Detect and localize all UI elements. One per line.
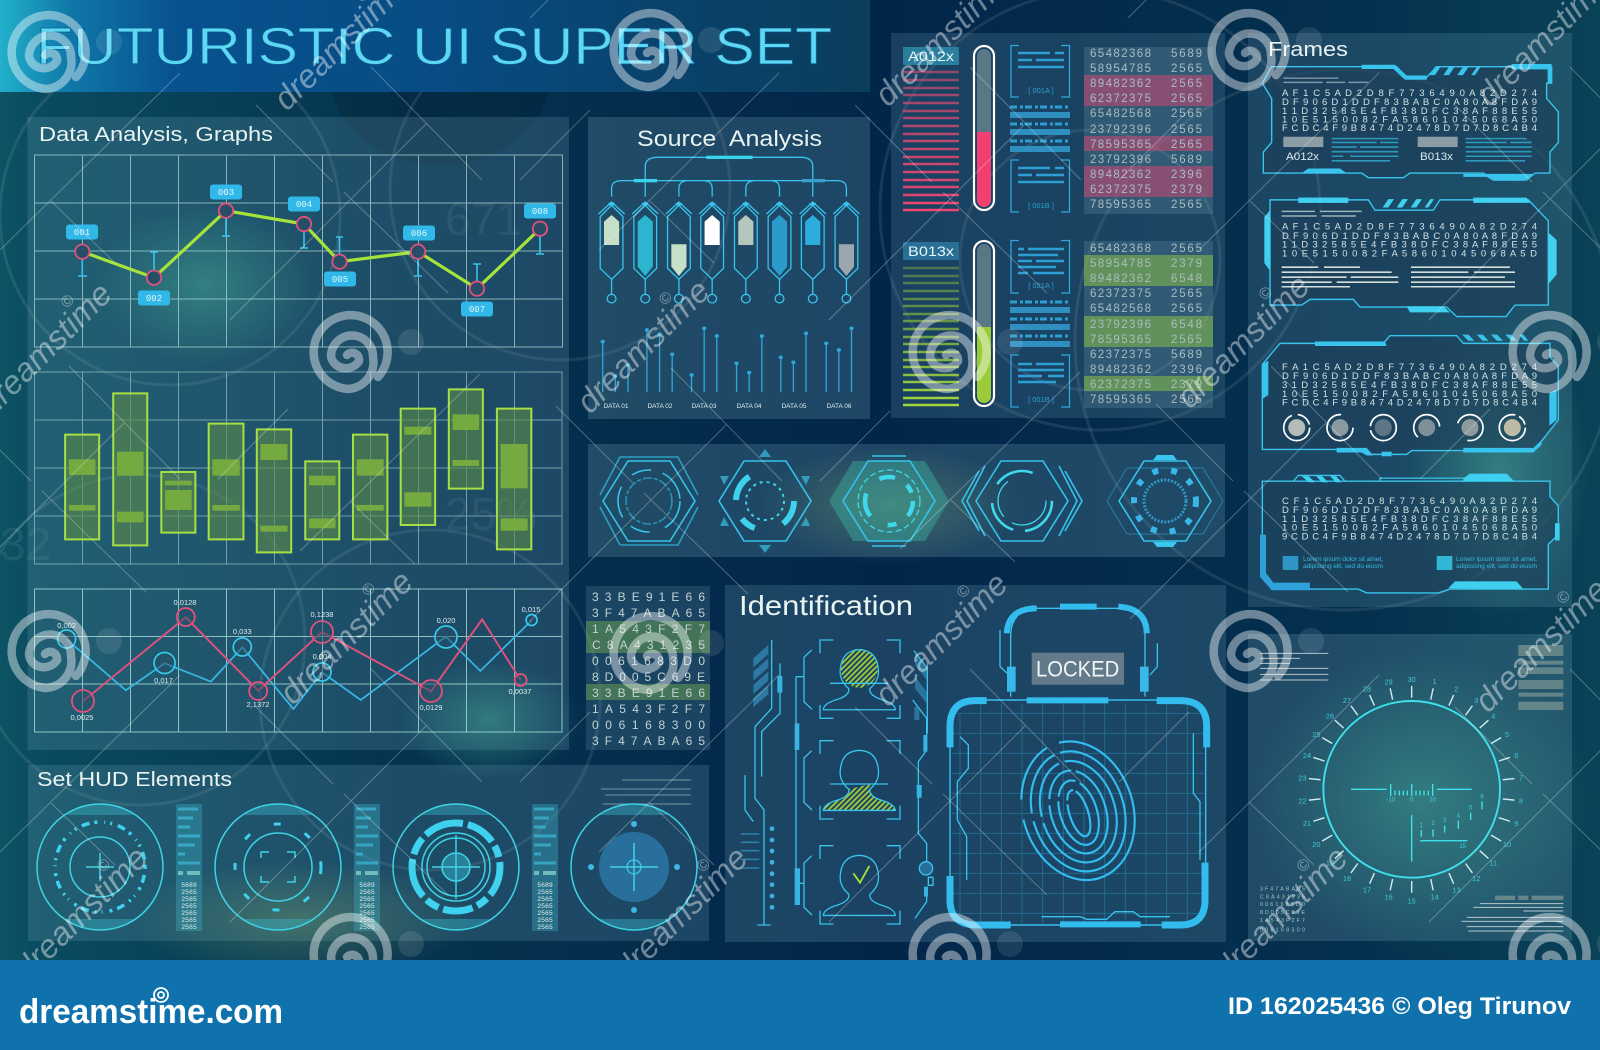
frame 4: adipiscing elit, sed do eiusm <box>1303 563 1383 570</box>
side bars and data lines: 8D005C69E <box>1260 910 1305 916</box>
panel: HUD elements <box>28 765 709 980</box>
table: A012x values: 23792396 <box>1090 154 1151 166</box>
scope numbers: 1 <box>1433 677 1437 686</box>
panel: identification <box>725 585 1226 942</box>
bracket text blocks <box>1010 46 1070 407</box>
table: B013x values: 78595365 <box>1090 334 1151 346</box>
fingerprint <box>1004 727 1152 895</box>
footer logo: dreamstime.com: dreamstime.com <box>19 993 283 1031</box>
lollipop chart: data 01-06: DATA 01 <box>603 403 629 410</box>
padlock with fingerprint <box>950 607 1207 925</box>
scope numbers: 11 <box>1490 859 1497 868</box>
table: A012x values: 62372375 <box>1090 184 1151 196</box>
side bars and data lines: 1A543F2F7 <box>1260 918 1305 924</box>
frame 3: F A 1 C 5 A D 2 D 8 F 7 7 3 6 4 9 0 A 8 2 D 2 7 4 <box>1282 362 1537 373</box>
frame 1: 1 1 D 3 2 5 8 5 E 4 F B 3 8 D F C 3 8 A F 8 8 E 5 5 <box>1282 106 1537 117</box>
scope numbers: 4 <box>1491 711 1495 720</box>
channel B013x: B013x <box>908 243 954 259</box>
table: B013x values: 2565 <box>1171 394 1202 406</box>
scope numbers: 20 <box>1312 840 1320 849</box>
panel: hex code list: 3F47ABA65 <box>592 606 705 620</box>
panel: hexagon indicators <box>588 444 1225 565</box>
table: A012x values: 89482362 <box>1090 169 1151 181</box>
channel A012x <box>903 46 994 210</box>
title: FUTURISTIC UI SUPER SET <box>36 18 832 76</box>
table: B013x values: 6548 <box>1171 319 1202 331</box>
table: A012x values: 78595365 <box>1090 139 1151 151</box>
line chart: cyan and pink series: 0,0025 <box>71 713 93 722</box>
line chart: cyan and pink series: 0,0129 <box>420 703 442 712</box>
line chart: cyan and pink series <box>34 589 562 732</box>
line chart: data points 001-008: 002 <box>146 294 162 304</box>
bracket text blocks: [ 001A ] <box>1028 86 1054 95</box>
frame 4: Lorem ipsum dolor sit amet, <box>1456 556 1537 563</box>
scope numbers: 28 <box>1363 684 1371 693</box>
table: A012x values: 2565 <box>1171 124 1202 136</box>
profile 2: shoulder scan <box>804 741 900 819</box>
side bars and data lines <box>1260 645 1563 934</box>
lollipop chart: data 01-06: DATA 02 <box>647 403 673 410</box>
line chart: data points 001-008: 006 <box>411 229 427 239</box>
frame 2: 1 0 E 5 1 5 0 0 8 2 F A 5 8 6 0 1 0 4 5 0 6 8 A 5 D <box>1282 248 1537 260</box>
frame 1: A F 1 C 5 A D 2 D 8 F 7 7 3 6 4 9 0 A 8 2 D 2 7 4 <box>1282 88 1537 99</box>
heading: set HUD elements: Set HUD Elements <box>37 769 232 791</box>
table: A012x values: 2565 <box>1171 93 1202 105</box>
frame 4: adipiscing elit, sed do eiusm <box>1456 563 1537 570</box>
scope circle <box>1323 701 1500 878</box>
panel: hex code list: 33BE91E66 <box>592 686 705 700</box>
scope numbers: 24 <box>1303 751 1311 760</box>
reticle scale: 2 <box>1431 821 1435 827</box>
frame 3: 1 0 E 5 1 5 0 0 8 2 F A 5 8 6 0 1 0 4 5 0 6 8 A 5 0 <box>1282 389 1537 400</box>
table: A012x values: 89482362 <box>1090 78 1151 90</box>
frame 4 <box>1260 474 1560 593</box>
scope numbers: 21 <box>1303 819 1311 828</box>
frame 1: B013x <box>1420 151 1454 163</box>
table: B013x values: 2565 <box>1171 303 1202 315</box>
heading: identification: Identification <box>739 590 913 621</box>
reticle scale: 5 <box>1469 805 1473 811</box>
panel: hex code list: C8A431235 <box>592 638 705 652</box>
table: A012x values: 2396 <box>1171 169 1202 181</box>
hexagon 1 <box>600 457 698 545</box>
panel: frames <box>1248 33 1590 620</box>
panel: radar scope <box>1248 634 1590 950</box>
lollipop chart: data 01-06: DATA 03 <box>691 403 717 410</box>
frame 2 <box>1264 198 1557 317</box>
table: A012x values: 2565 <box>1171 63 1202 75</box>
table: B013x values: 62372375 <box>1090 379 1151 391</box>
line chart: cyan and pink series: 0,1238 <box>311 610 333 619</box>
scope numbers: 14 <box>1431 893 1439 902</box>
scope numbers: 23 <box>1298 773 1306 782</box>
hexagon 5 <box>1107 455 1223 547</box>
table: A012x values: 2565 <box>1171 139 1202 151</box>
frame 1: D F 9 0 6 D 1 D D F 8 3 B A B C 0 A 8 0 A 8 F D A 9 <box>1282 97 1537 108</box>
panel: hex code list: 1A543F2F7 <box>592 702 705 716</box>
panel: hex code list: 33BE91E66 <box>592 590 705 604</box>
panel: hex code list: 3F47ABA65 <box>592 734 705 748</box>
table: B013x values: 62372375 <box>1090 288 1151 300</box>
reticle scale: 4 <box>1457 813 1461 819</box>
line chart: cyan and pink series: 2,1372 <box>247 700 269 709</box>
bracket text blocks: [ 001B ] <box>1028 201 1054 210</box>
table: B013x values: 2379 <box>1171 379 1202 391</box>
table: A012x values: 5689 <box>1171 48 1202 60</box>
table: B013x values: 6548 <box>1171 273 1202 285</box>
line chart: cyan and pink series: 0,020 <box>437 616 455 625</box>
table: B013x values: 65482568 <box>1090 303 1151 315</box>
table: A012x values: 65482568 <box>1090 108 1151 120</box>
table: A012x values: 2565 <box>1171 78 1202 90</box>
heading: frames: Frames <box>1268 39 1348 61</box>
table: A012x values: 2565 <box>1171 108 1202 120</box>
panel: source analysis <box>588 117 870 419</box>
panel: hex code list: 006168300 <box>592 718 705 732</box>
footer image credit: ID 162025436 © Oleg Tirunov <box>1228 993 1572 1020</box>
frame 1: A012x <box>1286 151 1320 163</box>
line chart: data points 001-008: 001 <box>74 228 90 238</box>
table: B013x values <box>1084 241 1213 408</box>
line chart: cyan and pink series: 0,0128 <box>174 598 196 607</box>
hexagon 2 <box>719 449 811 553</box>
scope numbers: 17 <box>1363 886 1371 895</box>
channel A012x: A012x <box>908 48 954 64</box>
frame 2: A F 1 C 5 A D 2 D 8 F 7 7 3 6 4 9 0 A 8 2 D 2 7 4 <box>1282 222 1537 233</box>
scope numbers <box>1298 675 1523 905</box>
LOCKED label: LOCKED <box>1036 657 1119 682</box>
scope numbers: 5 <box>1505 730 1509 739</box>
table: A012x values: 23792396 <box>1090 124 1151 136</box>
scope numbers: 12 <box>1472 874 1480 883</box>
lollipop chart: data 01-06: DATA 05 <box>781 403 807 410</box>
reticle scale: 15 <box>1459 844 1467 850</box>
scope numbers: 19 <box>1326 859 1334 868</box>
lollipop chart: data 01-06: DATA 06 <box>826 403 852 410</box>
scope numbers: 30 <box>1408 675 1416 684</box>
lollipop chart: data 01-06: DATA 04 <box>736 403 762 410</box>
table: A012x values: 2565 <box>1171 199 1202 211</box>
table: A012x values: 65482368 <box>1090 48 1151 60</box>
table: B013x values: 78595365 <box>1090 394 1151 406</box>
frame 4: Lorem ipsum dolor sit amet, <box>1303 556 1383 563</box>
table: A012x values: 5689 <box>1171 154 1202 166</box>
lollipop chart: data 01-06 <box>601 326 854 410</box>
text: 32 <box>0 518 51 570</box>
diagram: connected capsule gauges <box>599 156 859 303</box>
side bars and data lines: 0061683D0 <box>1260 902 1305 908</box>
frame 4: D F 9 0 6 D 1 D D F 8 3 B A B C 0 A 8 0 A 8 F D A 9 <box>1282 505 1537 516</box>
scope numbers: 26 <box>1326 711 1334 720</box>
title banner <box>0 0 870 92</box>
frame 4: 1 0 E 5 1 5 0 0 8 2 F A 5 8 6 0 1 0 4 5 0 6 8 A 5 0 <box>1282 522 1537 534</box>
table: A012x values: 78595365 <box>1090 199 1151 211</box>
frame 3: F C D C 4 F 9 B 8 4 7 4 D 2 4 7 8 D 7 D 7 D 8 C 4 B 4 <box>1282 397 1537 408</box>
data columns <box>176 804 558 931</box>
text: 25% <box>445 488 537 540</box>
table: B013x values: 2565 <box>1171 288 1202 300</box>
reticle scale: 3 <box>1443 818 1447 824</box>
table: B013x values: 65482368 <box>1090 243 1151 255</box>
scope numbers: 29 <box>1385 677 1393 686</box>
left circuit decoration <box>741 640 804 925</box>
reticle scale: -10 <box>1386 797 1396 803</box>
frame 1: F C D C 4 F 9 B 8 4 7 4 D 2 4 7 8 D 7 D 7 D 8 C 4 B 4 <box>1282 123 1537 134</box>
table: B013x values: 62372375 <box>1090 349 1151 361</box>
line chart: cyan and pink series: 0,017 <box>154 676 173 685</box>
channel B013x <box>903 241 994 406</box>
table: B013x values: 89482362 <box>1090 273 1151 285</box>
status dials <box>1284 415 1525 441</box>
line chart: cyan and pink series: 0,015 <box>522 605 540 614</box>
bracket text blocks: [ 001B ] <box>1028 395 1054 404</box>
scope tick marks <box>1309 686 1514 893</box>
table: B013x values: 2565 <box>1171 334 1202 346</box>
frame 4: 9 C D C 4 F 9 B 8 4 7 4 D 2 4 7 8 D 7 D 7 D 8 C 4 B 4 <box>1282 531 1537 542</box>
table: A012x values: 58954785 <box>1090 63 1151 75</box>
table: B013x values: 89482362 <box>1090 364 1151 376</box>
line chart: data points 001-008: 007 <box>469 305 485 315</box>
table: A012x values: 2379 <box>1171 184 1202 196</box>
profile 3: verified <box>804 846 900 924</box>
scope numbers: 22 <box>1298 797 1306 806</box>
reticle scale: 6 <box>1480 795 1484 801</box>
side bars and data lines: 006168300 <box>1260 928 1305 934</box>
line chart: data points 001-008: 003 <box>218 188 234 198</box>
scope numbers: 3 <box>1474 696 1478 705</box>
scope numbers: 8 <box>1519 797 1523 806</box>
hexagon 3 <box>829 456 949 546</box>
heading: source analysis: Source Analysis <box>637 126 822 151</box>
hexagon 4 <box>962 461 1082 541</box>
bar chart: green range bars <box>34 372 562 564</box>
line chart: cyan and pink series: 0,002 <box>57 621 76 630</box>
profile 1: head scan <box>804 640 900 718</box>
right circuit decoration <box>913 651 933 918</box>
table: B013x values: 2396 <box>1171 364 1202 376</box>
footer bar <box>0 960 1600 1050</box>
table: A012x values: 62372375 <box>1090 93 1151 105</box>
HUD dial 2 <box>215 804 341 930</box>
scope numbers: 10 <box>1503 840 1511 849</box>
panel: data analysis and graphs <box>28 117 580 780</box>
reticle scale <box>1351 784 1484 862</box>
frame 1 <box>1262 64 1558 181</box>
table: B013x values: 23792396 <box>1090 319 1151 331</box>
text: 671 <box>445 193 522 245</box>
reticle scale: 10 <box>1429 797 1437 803</box>
bracket text blocks: [ 021A ] <box>1028 281 1054 290</box>
line chart: data points 001-008: 008 <box>532 207 548 217</box>
HUD dial 3 <box>393 804 519 930</box>
HUD dial 1 <box>37 804 163 930</box>
panel: data tables and level gauges <box>891 33 1225 418</box>
scope numbers: 16 <box>1385 893 1393 902</box>
scope numbers: 25 <box>1312 730 1320 739</box>
side bars and data lines: C8A431235 <box>1260 894 1305 900</box>
panel: hex code list: 0061683D0 <box>592 654 705 668</box>
scope numbers: 27 <box>1343 696 1351 705</box>
line chart: cyan and pink series: 0,0037 <box>509 687 531 696</box>
scope numbers: 18 <box>1343 874 1351 883</box>
HUD dial 4 <box>571 804 697 930</box>
line chart: data points 001-008: 005 <box>332 275 348 285</box>
table: B013x values: 2565 <box>1171 243 1202 255</box>
table: B013x values: 58954785 <box>1090 258 1151 270</box>
table: A012x values <box>1084 47 1213 214</box>
scope numbers: 15 <box>1408 896 1416 905</box>
frame 3: D F 9 0 6 D 1 D D F 8 3 B A B C 0 A 8 0 A 8 F D A 9 <box>1282 371 1537 382</box>
frame 3: 3 1 D 3 2 5 8 5 E 4 F B 3 8 D F C 3 8 A F 8 8 E 5 5 <box>1282 380 1537 391</box>
frame 3 <box>1262 335 1558 456</box>
line chart: cyan and pink series: 0,004 <box>313 652 331 661</box>
heading: data analysis: Data Analysis, Graphs <box>39 124 273 146</box>
frame 4: 1 1 D 3 2 5 8 5 E 4 F B 3 8 D F C 3 8 A F 8 8 E 5 5 <box>1282 514 1537 525</box>
table: B013x values: 2379 <box>1171 258 1202 270</box>
scope numbers: 13 <box>1452 886 1460 895</box>
scope numbers: 6 <box>1514 751 1518 760</box>
footer logo: spiral <box>154 988 168 1002</box>
line chart: data points 001-008: 004 <box>296 200 312 210</box>
scope numbers: 7 <box>1519 773 1523 782</box>
reticle scale: 0 <box>1410 797 1414 803</box>
side bars and data lines: 3F47ABA65 <box>1260 887 1305 893</box>
reticle scale: 1 <box>1420 823 1424 829</box>
scope numbers: 9 <box>1514 819 1518 828</box>
frame 4: C F 1 C 5 A D 2 D 8 F 7 7 3 6 4 9 0 A 8 2 D 2 7 4 <box>1282 496 1537 507</box>
panel: hex code list <box>586 586 710 750</box>
line chart: data points 001-008 <box>34 155 562 347</box>
frame 2: D F 9 0 6 D 1 D D F 8 3 B A B C 0 A 8 0 A 8 F D A 9 <box>1282 231 1537 242</box>
panel: hex code list: 1A543F2F7 <box>592 622 705 636</box>
table: B013x values: 5689 <box>1171 349 1202 361</box>
scope numbers: 2 <box>1454 684 1458 693</box>
panel: hex code list: 8D005C69E <box>592 670 705 684</box>
frame 1: 1 0 E 5 1 5 0 0 8 2 F A 5 8 6 0 1 0 4 5 0 6 8 A 5 0 <box>1282 114 1537 126</box>
frame 2: 1 1 D 3 2 5 8 5 E 4 F B 3 8 D F C 3 8 A F 8 8 E 5 5 <box>1282 240 1537 251</box>
line chart: cyan and pink series: 0,033 <box>233 627 252 636</box>
